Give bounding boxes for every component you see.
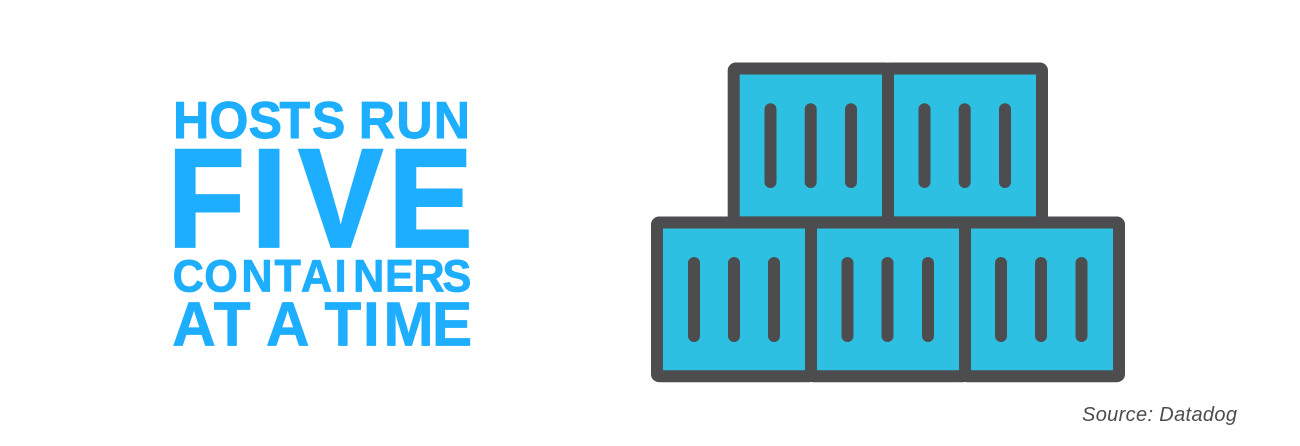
heading line: FIVE: FIVE: [168, 120, 472, 277]
icon: stacked shipping containers: [657, 68, 1119, 376]
container: bottom right: [965, 222, 1119, 376]
heading line: HOSTS RUN: HOSTS RUN: [173, 91, 470, 149]
title: hosts run five containers at a time: [168, 91, 472, 359]
container: top right: [888, 68, 1042, 222]
source credit: Source: Datadog: [1082, 404, 1237, 426]
container: bottom left: [657, 222, 811, 376]
heading line: AT A TIME: AT A TIME: [172, 290, 472, 359]
container: bottom middle: [811, 222, 965, 376]
heading line: CONTAINERS: CONTAINERS: [173, 252, 471, 302]
container: top left: [734, 68, 888, 222]
